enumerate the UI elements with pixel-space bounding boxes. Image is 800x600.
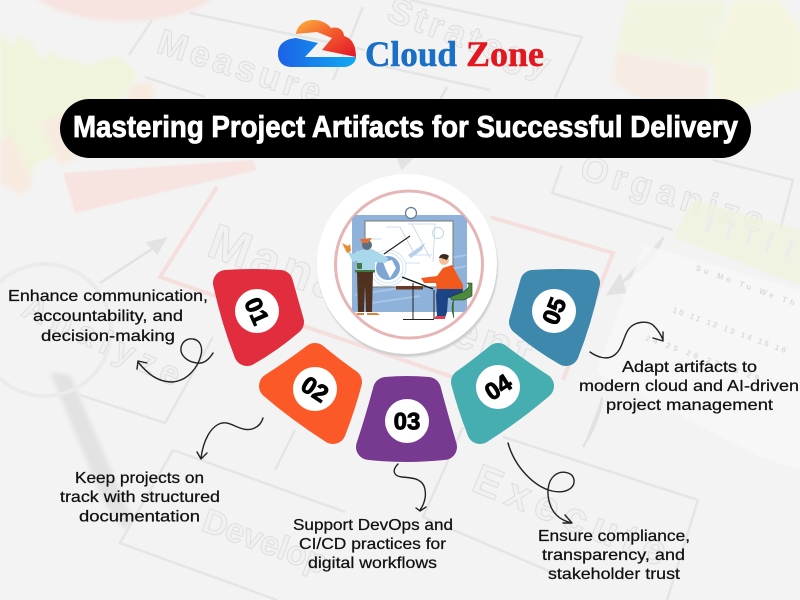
number badge 05: 05 — [537, 294, 572, 329]
text: benefit 5: Adapt artifacts to — [622, 359, 757, 376]
central illustration circle — [317, 174, 498, 357]
number badge 03: 03 — [394, 408, 420, 436]
background: measure box — [129, 7, 365, 112]
backdrop brush strokes — [355, 255, 466, 305]
calendar month labels: Su Mo Tu We Th — [694, 263, 796, 308]
step 04 — [464, 356, 541, 431]
arrow: step 03 to text — [394, 464, 426, 511]
shape: blue tab — [522, 282, 587, 353]
background: execute box — [423, 427, 698, 600]
icon: cloud — [278, 20, 356, 67]
background: strategy box — [378, 0, 582, 98]
background: develop box — [120, 430, 345, 600]
background: analyze box and magnifier — [0, 264, 213, 530]
shape: red tab — [226, 282, 291, 353]
text: benefit 4 — [538, 528, 690, 583]
text: benefit 2: Keep projects on — [75, 470, 204, 487]
logo word: Cloud: Cloud — [365, 34, 457, 74]
desk — [396, 277, 434, 320]
text: benefit 5 — [579, 359, 799, 414]
logo word: Zone: Zone — [466, 34, 544, 74]
text: benefit 1: decision-making — [41, 328, 175, 345]
text: benefit 1: Enhance communication, — [8, 288, 208, 305]
calendar dates row 1: 10 11 12 13 14 15 16 — [671, 305, 788, 355]
whiteboard — [365, 221, 453, 287]
text: benefit 4: Ensure compliance, — [538, 528, 690, 545]
text: benefit 4: transparency, and — [542, 547, 685, 564]
title text: Mastering Project Artifacts for Successful Delivery — [73, 109, 739, 144]
text: benefit 3: CI/CD practices for — [299, 536, 447, 553]
background: calendar — [596, 200, 800, 470]
text: benefit 5: modern cloud and AI-driven — [579, 378, 799, 395]
background word: Management: Management — [201, 213, 540, 382]
background word: Organize: Organize — [576, 146, 769, 241]
arrow: step 01 to text — [137, 339, 213, 382]
arrow: step 02 to text — [197, 418, 263, 459]
background: bar chart — [0, 33, 156, 196]
illustration backdrop — [352, 215, 467, 312]
step 03 — [369, 389, 444, 449]
text: benefit 4: stakeholder trust — [548, 566, 681, 583]
teacher — [342, 236, 410, 315]
background: red arc at top — [25, 0, 225, 21]
title banner — [60, 99, 751, 158]
number badge 04: 04 — [480, 369, 518, 406]
arrow: step 04 to text — [508, 443, 574, 523]
step 01 — [226, 282, 291, 353]
text: benefit 2: documentation — [79, 508, 200, 526]
number badge 02: 02 — [296, 371, 333, 408]
shape: purple tab — [369, 389, 444, 449]
background word: Analyze: Analyze — [17, 288, 187, 394]
background: arrows — [100, 87, 663, 447]
background word: Execute: Execute — [467, 455, 674, 575]
student — [421, 254, 463, 319]
text: benefit 2 — [60, 470, 220, 526]
number badge 01: 01 — [238, 294, 274, 329]
text: benefit 3 — [293, 517, 453, 572]
logo: Cloud Zone — [278, 20, 544, 74]
shape: orange tab — [272, 356, 349, 431]
background word: Develop: Develop — [197, 502, 332, 582]
step 02 — [272, 356, 349, 431]
text: benefit 3: digital workflows — [308, 555, 437, 572]
text: benefit 3: Support DevOps and — [293, 517, 453, 534]
background word: Measure: Measure — [153, 21, 327, 112]
background: pie chart — [613, 0, 800, 110]
shape: teal tab — [464, 356, 541, 431]
wall clock — [406, 208, 416, 218]
text: benefit 2: track with structured — [60, 489, 220, 506]
text: benefit 1 — [8, 288, 208, 345]
background: manage box — [160, 187, 613, 400]
step 05 — [522, 282, 587, 353]
text: benefit 5: project management — [606, 397, 774, 414]
illustration: teacher and student at whiteboard — [342, 208, 472, 320]
chair — [450, 283, 472, 318]
arrow: step 05 to text — [590, 322, 663, 358]
background: organize box — [552, 146, 793, 241]
text: benefit 1: accountability, and — [33, 308, 183, 325]
background: red block — [63, 160, 257, 213]
calendar dates row 2: 24 25 26 27 28 29 — [644, 333, 761, 383]
